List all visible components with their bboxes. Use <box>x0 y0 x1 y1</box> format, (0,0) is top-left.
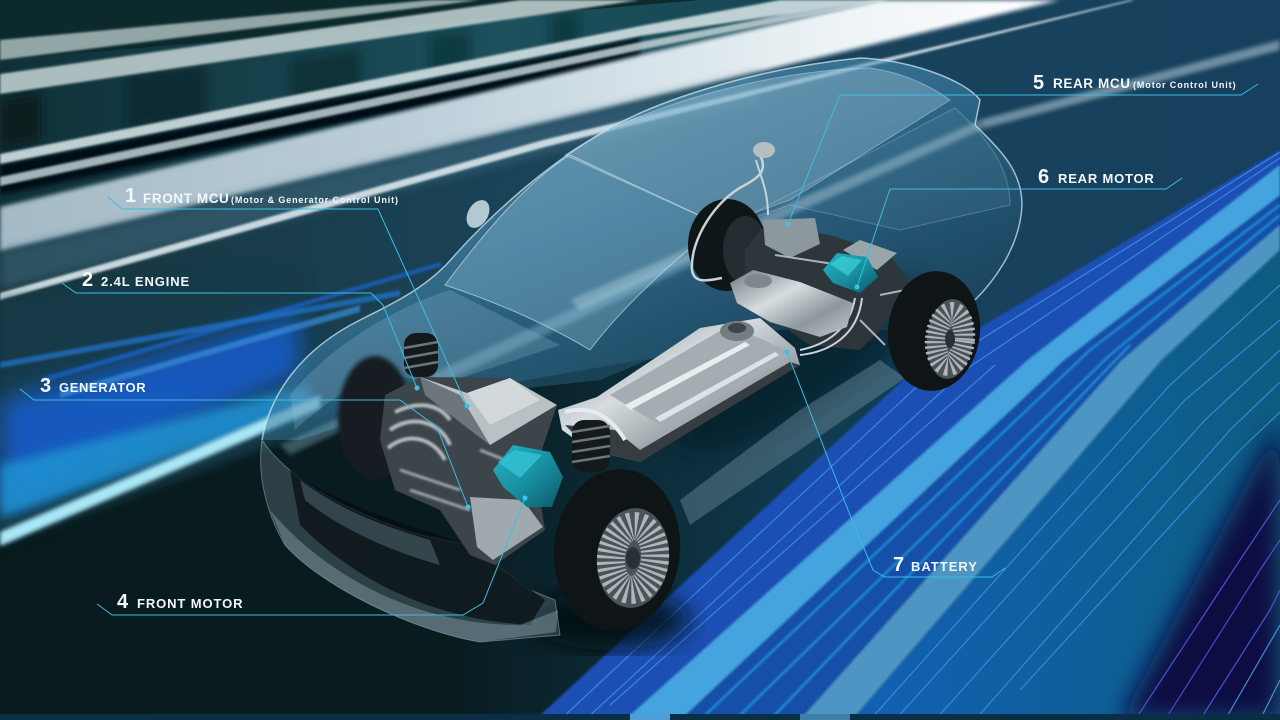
label 1: front MCU: (Motor & Generator Control Unit) <box>231 195 399 205</box>
label 5: rear MCU <box>1033 72 1236 94</box>
front right wheel <box>546 463 688 637</box>
engine <box>380 377 557 565</box>
car: ghost battery reflection <box>680 360 905 525</box>
label 6: rear motor <box>1038 166 1155 188</box>
label 2: engine: 2.4L ENGINE <box>101 274 190 289</box>
windshield and roof glass <box>445 155 720 350</box>
label 4: front motor <box>117 591 243 613</box>
label 2: engine: 2 <box>82 269 93 291</box>
floor under the car <box>0 330 1010 720</box>
label 6: rear motor: 6 <box>1038 166 1049 188</box>
rear machinery and hoses <box>692 142 912 355</box>
label 5: rear MCU: 5 <box>1033 72 1044 94</box>
icon: rear motor <box>823 253 878 293</box>
label 4: front motor: 4 <box>117 591 129 613</box>
label 3: generator: GENERATOR <box>59 380 146 395</box>
label 5: rear MCU: REAR MCU <box>1053 76 1131 91</box>
left blue streaks <box>0 315 300 510</box>
label 3: generator: 3 <box>40 375 51 397</box>
leader endpoints <box>414 222 860 510</box>
icon: front motor <box>493 445 563 507</box>
label 7: battery: BATTERY <box>911 559 978 574</box>
car: translucent body <box>261 58 1022 642</box>
label 7: battery <box>893 554 978 576</box>
dark columns <box>0 10 580 150</box>
rear left wheel <box>688 199 767 291</box>
main white band <box>0 0 1060 251</box>
leader lines <box>20 84 1258 615</box>
label 7: battery: 7 <box>893 554 904 576</box>
label 2: engine <box>82 269 190 291</box>
front left wheel <box>338 356 412 480</box>
label 1: front MCU <box>125 185 399 207</box>
front fascia <box>261 440 560 642</box>
front suspension spring <box>404 333 610 472</box>
right streaks <box>852 250 1280 720</box>
label 5: rear MCU: (Motor Control Unit) <box>1133 80 1236 90</box>
mirror <box>462 196 494 232</box>
label 1: front MCU: 1 <box>125 185 136 207</box>
rear right wheel <box>882 267 986 395</box>
battery <box>558 318 800 462</box>
top-left white streaks <box>0 38 640 195</box>
label 1: front MCU: FRONT MCU <box>143 191 229 206</box>
label 3: generator <box>40 375 146 397</box>
cabin light streak <box>570 120 985 310</box>
car: shadow <box>530 236 953 650</box>
hood fill <box>290 290 560 430</box>
label 4: front motor: FRONT MOTOR <box>137 596 243 611</box>
fuel tank <box>730 270 853 337</box>
label 6: rear motor: REAR MOTOR <box>1058 171 1155 186</box>
